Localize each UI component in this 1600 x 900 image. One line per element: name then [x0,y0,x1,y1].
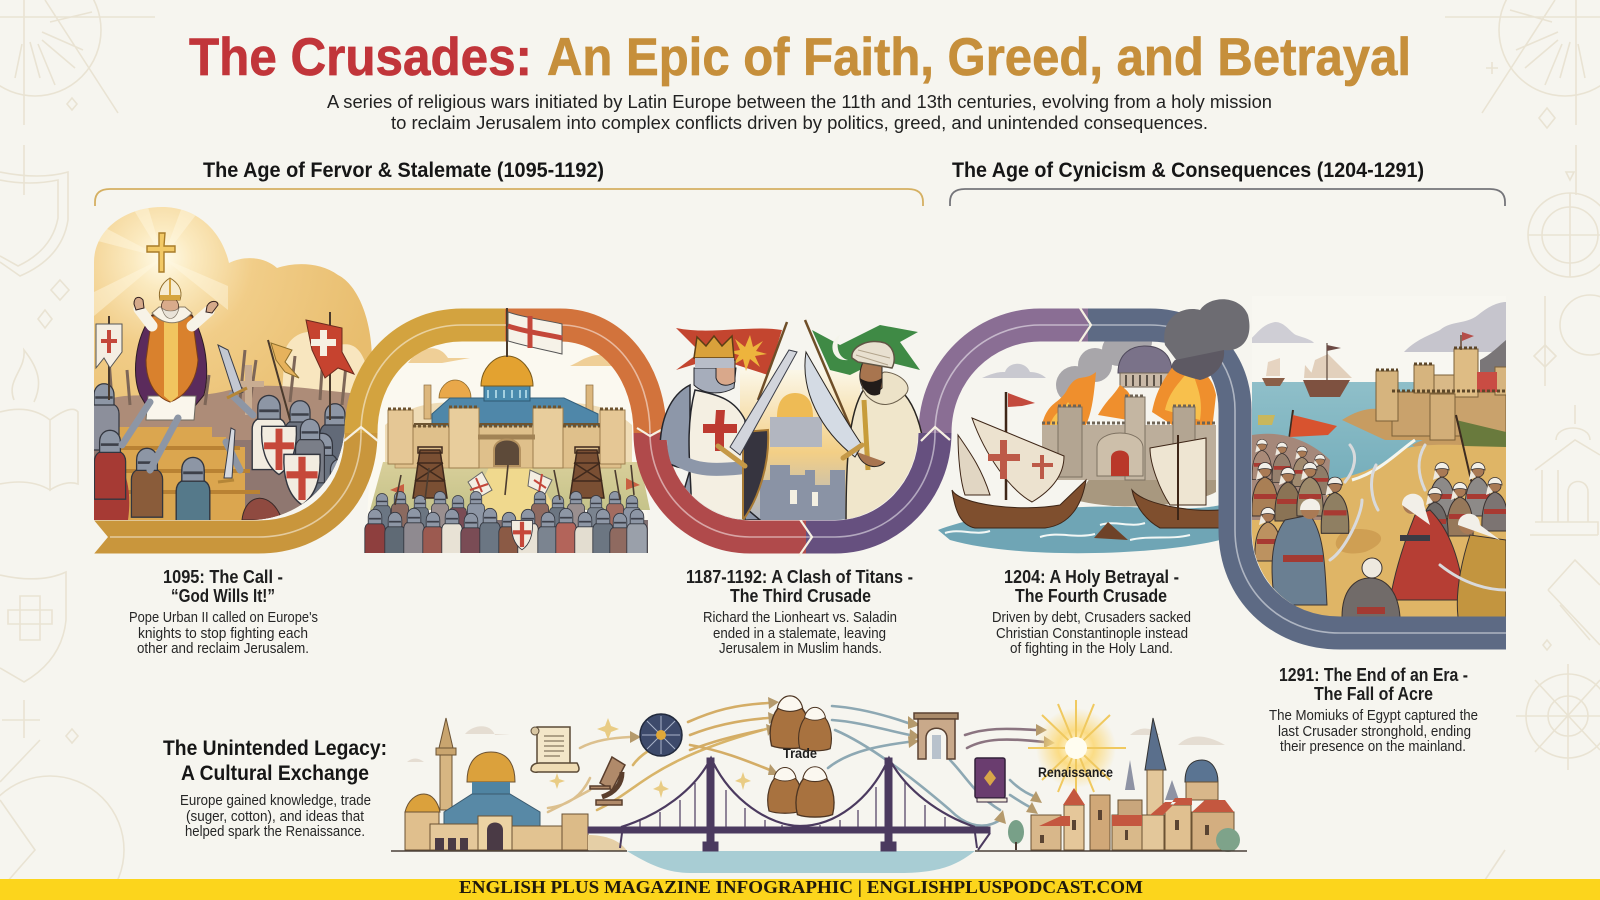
text: 1095 the call [129,567,318,657]
illustration: 1095 the call [89,200,380,532]
text: 1187-1192 clash of titans [686,567,913,657]
cloud [982,364,1046,378]
ribbon: red [650,433,806,537]
text: the unintended legacy: Europe gained knowledge, trade [180,793,371,809]
swords and banners [96,312,354,482]
title: An Epic of Faith, Greed, and Betrayal [547,28,1411,87]
flag: richard [676,328,782,375]
pope figure [134,278,218,420]
subtitle: to reclaim Jerusalem into complex conflicts driven by politics, greed, and unintended consequences. [391,112,1208,133]
small clouds [407,726,1225,762]
small crusader flags [390,470,640,498]
castle [1042,396,1216,506]
light smoke [1056,330,1152,404]
beach [1252,445,1506,620]
text: the unintended legacy: A Cultural Exchange [181,762,369,785]
suspension bridge [588,758,990,851]
text: 1095 the call: other and reclaim Jerusalem. [137,641,309,657]
icon: book [975,758,1007,802]
label: trade: Trade [783,746,817,761]
ribbon: dark purple [806,433,935,537]
text: 1291 the end of an era [1269,665,1478,755]
text: 1204 a holy betrayal: 1204: A Holy Betrayal - [1004,567,1179,587]
illustration: constantinople sack scene [938,330,1220,553]
icon: microscope [590,757,625,805]
mamluk warriors [1252,434,1508,617]
text: 1095 the call: knights to stop fighting each [138,626,308,642]
jerusalem city walls and domes [388,356,625,468]
illustration: clash of titans [660,320,927,520]
ribbon: gold lower [94,433,361,537]
label: renaissance: Renaissance [1038,765,1113,780]
sparkles [549,718,751,798]
arrow heads [630,697,1055,824]
flow arrows [548,703,1044,826]
text: 1187-1192 clash of titans: 1187-1192: A Clash of Titans - [686,567,913,587]
warrior: saladin [805,341,927,520]
ribbon: gold upper [361,325,510,433]
flames [1042,345,1216,430]
ribbon: orange [505,325,650,433]
text: the unintended legacy: (suger, cotton), and ideas that [186,809,364,825]
icon: sacks bottom [768,767,834,817]
fortress [1342,332,1507,455]
icon: compass [640,714,682,756]
icon: sun [1028,700,1126,796]
knight: richard the lionheart [660,336,797,520]
text: 1204 a holy betrayal: of fighting in the Holy Land. [1010,641,1173,657]
icon: sacks top [770,696,831,751]
text: the unintended legacy: The Unintended Legacy: [163,737,387,760]
illustration: fall of acre [1240,296,1510,621]
bracket: age of cynicism [950,189,1505,206]
text: 1291 the end of an era: last Crusader stronghold, ending [1278,724,1471,740]
text: 1187-1192 clash of titans: Jerusalem in Muslim hands. [719,641,882,657]
jerusalem background [760,393,845,520]
text: 1204 a holy betrayal: The Fourth Crusade [1015,586,1167,606]
water [938,505,1220,553]
ribbon inner line [110,325,1506,633]
illustration: cultural exchange bridge [391,696,1247,873]
footer text: ENGLISH PLUS MAGAZINE INFOGRAPHIC | ENGLISHPLUSPODCAST.COM [459,877,1143,897]
flags [1258,410,1506,482]
footer bar [0,879,1600,900]
s-curve timeline ribbon [94,325,1506,633]
ribbon joints [344,308,1091,556]
siege army crowd [365,465,648,558]
text: 1291 the end of an era: 1291: The End of an Era - [1279,665,1468,685]
scimitars [1330,445,1506,590]
text: 1095 the call: “God Wills It!” [171,586,275,606]
text: 1291 the end of an era: The Fall of Acre [1314,684,1433,704]
text: the unintended legacy [163,737,387,840]
siege towers [413,447,604,498]
islamic city [405,718,627,851]
bracket: age of fervor [95,189,923,206]
text: the unintended legacy: helped spark the Renaissance. [185,824,365,840]
european city [1008,718,1240,852]
ribbon: slate [1088,325,1506,633]
ground line [391,850,1247,852]
text: 1187-1192 clash of titans: The Third Crusade [730,586,871,606]
text: 1204 a holy betrayal [992,567,1191,657]
text: 1204 a holy betrayal: Christian Constantinople instead [996,626,1188,642]
title [189,28,1411,87]
subtitle [327,91,1272,133]
river [627,851,975,873]
sinking boat [1094,522,1128,540]
ship with crusader sails [952,392,1086,528]
title: The Crusades: [189,28,532,87]
text: 1187-1192 clash of titans: Richard the Lionheart vs. Saladin [703,610,897,626]
icon: golden cross [147,233,175,272]
icon: arch [914,713,958,759]
text: 1187-1192 clash of titans: ended in a stalemate, leaving [713,626,886,642]
text: 1095 the call: Pope Urban II called on Europe's [129,610,318,626]
ribbon tail notch [93,519,108,555]
knights crowd: call [94,383,346,520]
text: 1291 the end of an era: The Momiuks of Egypt captured the [1269,708,1478,724]
smoke cloud [1164,299,1249,380]
heading: age of fervor: The Age of Fervor & Stalemate (1095-1192) [203,159,604,182]
subtitle: A series of religious wars initiated by Latin Europe between the 11th and 13th centuries, evolving from a holy mission [327,91,1272,112]
icon: scroll [531,727,579,772]
ribbon: light purple [935,325,1090,433]
castle dome [1118,346,1172,387]
text: 1095 the call: 1095: The Call - [163,567,283,587]
flag: saladin [812,325,920,375]
heading: age of cynicism: The Age of Cynicism & Consequences (1204-1291) [952,159,1424,182]
text: 1204 a holy betrayal: Driven by debt, Crusaders sacked [992,610,1191,626]
flag over jerusalem [507,308,562,357]
ships [1262,343,1352,397]
steps [110,427,260,520]
second ship [1132,435,1220,528]
illustration: jerusalem siege [365,338,650,558]
text: 1291 the end of an era: their presence on the mainland. [1280,739,1466,755]
